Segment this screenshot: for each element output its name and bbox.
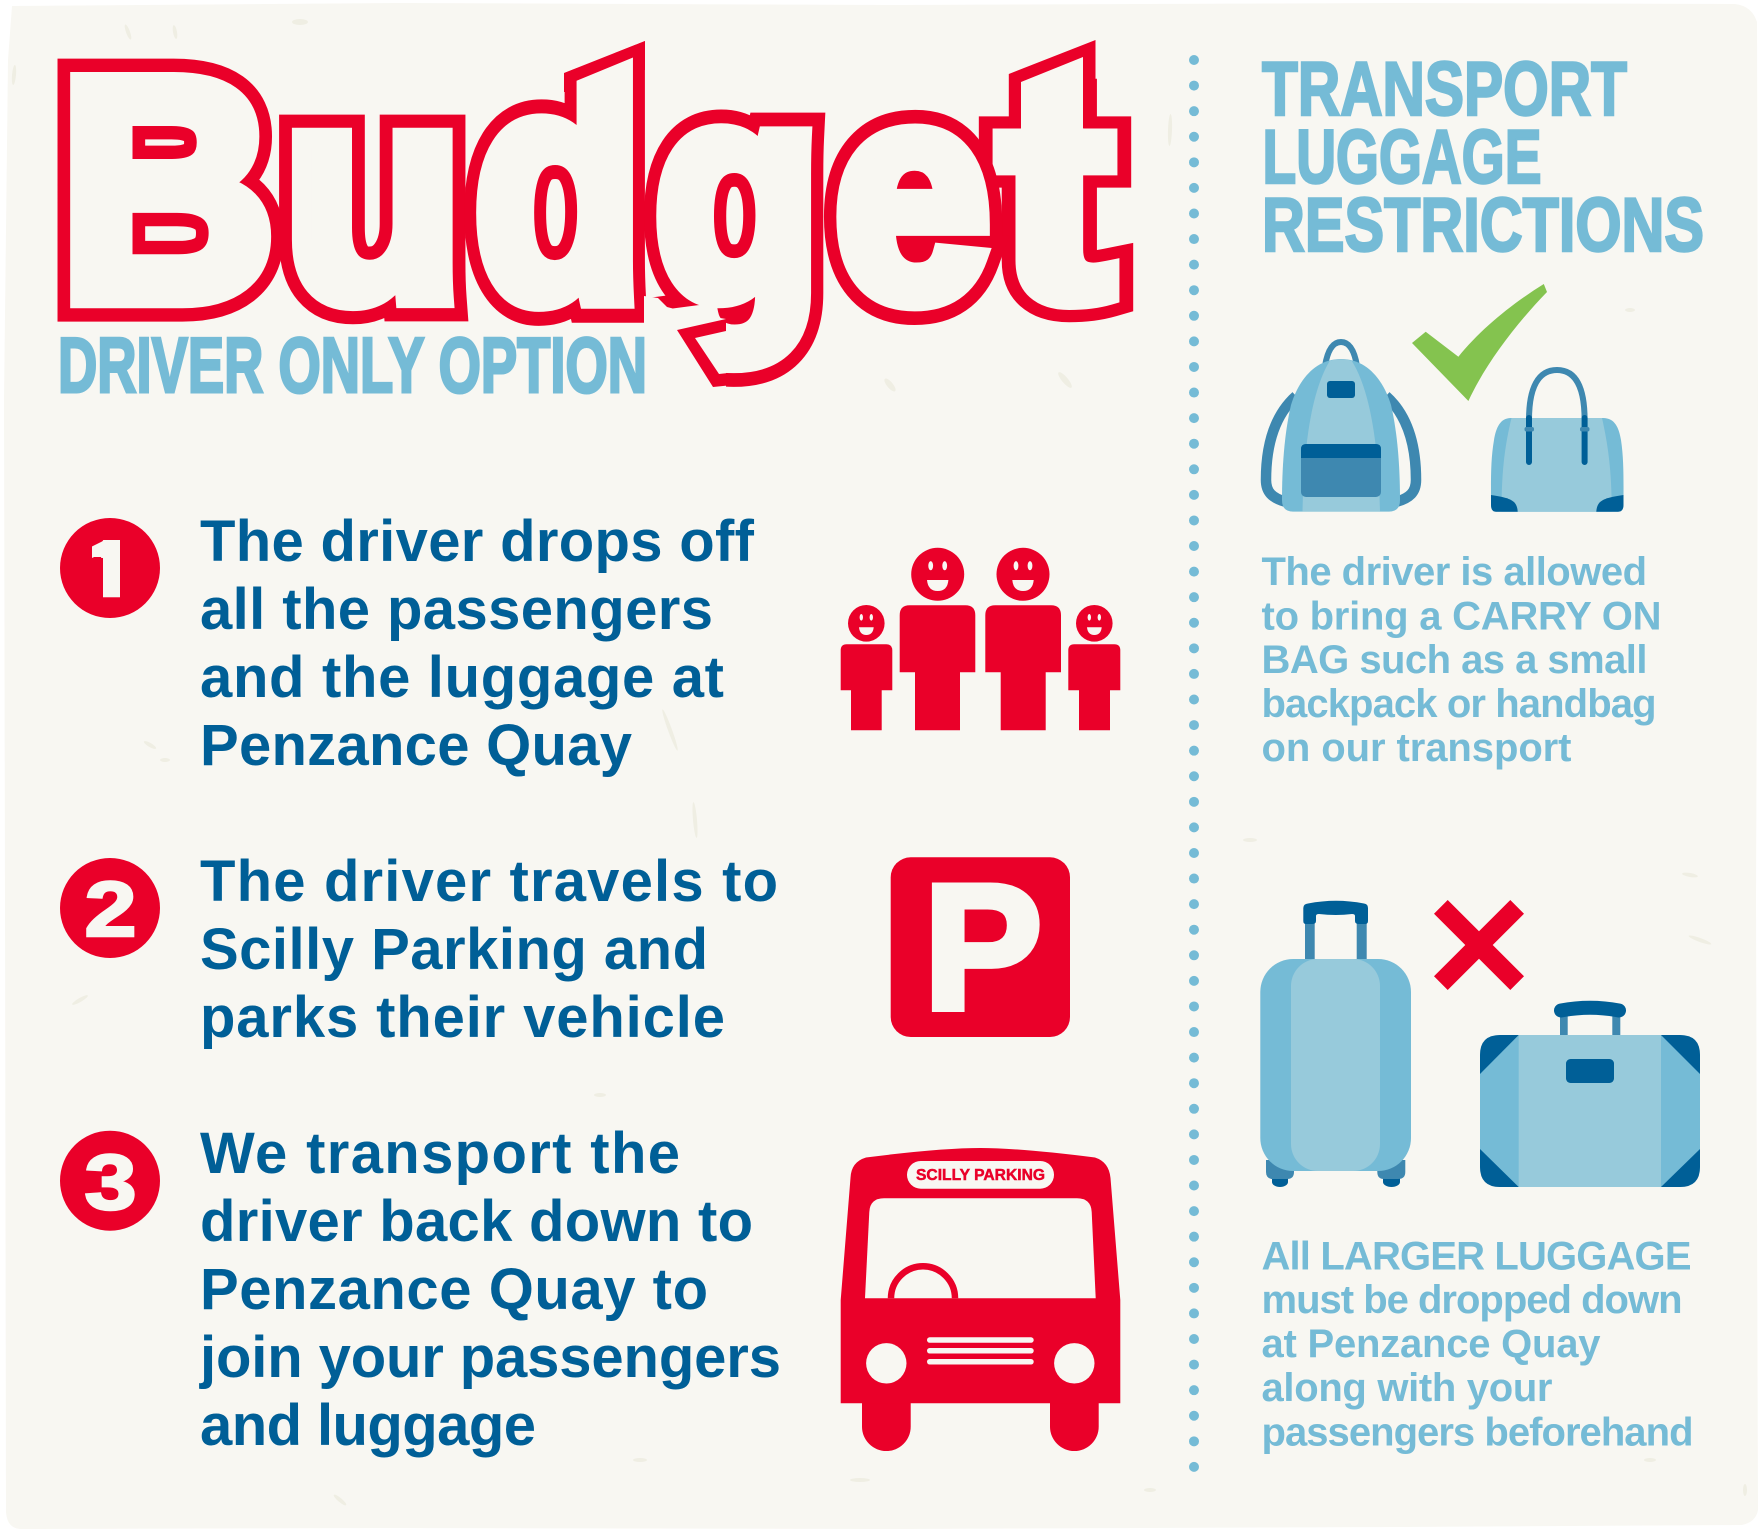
grille [927, 1337, 1034, 1364]
case handle poles [1560, 1012, 1620, 1036]
bus body [841, 1148, 1120, 1403]
icon: large suitcase [1480, 1008, 1700, 1187]
person: adult left [900, 548, 975, 730]
backpack pocket [1301, 444, 1381, 497]
letter d: d [474, 6, 643, 367]
destination sign: SCILLY PARKING [916, 1167, 1045, 1184]
step 3 text: Penzance Quay to [200, 1257, 708, 1322]
letter B: B [60, 14, 275, 365]
letter u: u [284, 25, 463, 363]
letter e: e [835, 22, 990, 363]
icon: parking sign: P [924, 848, 1042, 1046]
backpack handle [1325, 342, 1357, 366]
letter g: g [654, 23, 821, 365]
step 1 text: and the luggage at [200, 645, 724, 710]
person: child left [841, 605, 892, 730]
step 1 text: all the passengers [200, 577, 713, 642]
step 2 number badge: 2 [84, 866, 137, 953]
step 3 number badge [60, 1131, 160, 1231]
step 1 number badge [60, 518, 160, 618]
case tag [1566, 1059, 1614, 1083]
backpack front panel [1302, 359, 1380, 512]
text: carry on allowance: The driver is allowed [1262, 550, 1647, 594]
heading: transport luggage restrictions [1262, 47, 1704, 268]
step 1 text [200, 509, 755, 778]
text: carry on allowance: on our transport [1262, 726, 1572, 770]
case front panel [1519, 1035, 1661, 1187]
step 3 text: driver back down to [200, 1189, 753, 1254]
case handle bar [1561, 1008, 1619, 1010]
text: larger luggage rule: along with your [1262, 1366, 1552, 1410]
bus windscreen [865, 1198, 1096, 1298]
text: carry on allowance: to bring a CARRY ON [1262, 594, 1662, 638]
letter d: d [474, 6, 643, 367]
icon: parking sign [891, 848, 1070, 1046]
icon: trolley suitcase [1260, 901, 1411, 1187]
suitcase handle poles [1305, 920, 1367, 960]
case corners [1480, 1035, 1700, 1187]
letter g: g [654, 23, 821, 365]
text: carry on allowance: backpack or handbag [1262, 682, 1656, 726]
suitcase body [1260, 959, 1411, 1171]
step 3 text: join your passengers [199, 1325, 781, 1390]
suitcase wheels [1266, 1160, 1405, 1187]
angular tail of the g [644, 296, 728, 395]
heading: transport luggage restrictions: LUGGAGE [1262, 115, 1542, 200]
person: child right [1068, 605, 1120, 730]
steering wheel [891, 1266, 955, 1298]
suitcase front panel [1291, 959, 1380, 1171]
step 1 number badge: 1 [79, 526, 135, 613]
text: larger luggage rule: must be dropped down [1262, 1278, 1682, 1322]
step 3 text: and luggage [200, 1393, 536, 1458]
handbag front panel [1502, 418, 1612, 512]
icon: green check mark [1412, 284, 1547, 401]
backpack straps [1266, 396, 1416, 502]
heading: transport luggage restrictions: TRANSPORT [1262, 47, 1627, 132]
text: larger luggage rule: at Penzance Quay [1262, 1322, 1601, 1366]
backpack body [1282, 359, 1400, 512]
letter t: t [999, 23, 1113, 363]
letter t: t [999, 23, 1113, 363]
handbag handle straps [1524, 418, 1590, 462]
destination sign [907, 1161, 1054, 1189]
person: adult right [985, 548, 1061, 730]
step 2 text [200, 849, 778, 1050]
suitcase handle bar [1303, 901, 1368, 924]
step 3 text [199, 1121, 781, 1458]
icon: red cross [1434, 900, 1524, 990]
step 3 number badge: 3 [84, 1139, 137, 1226]
step 3 text: We transport the [200, 1121, 680, 1186]
step 2 number badge [60, 858, 160, 958]
case body [1480, 1035, 1700, 1187]
step 2 text: parks their vehicle [200, 985, 725, 1050]
headlights [866, 1343, 1095, 1384]
slanted top of the d stem [552, 25, 660, 92]
handbag handle [1529, 370, 1585, 420]
subtitle: driver only option: DRIVER ONLY OPTION [58, 321, 647, 409]
icon: Scilly Parking bus [841, 1148, 1120, 1451]
backpack tag [1327, 381, 1355, 398]
title: Budget logo wordmark [60, 6, 1113, 395]
step 1 text: Penzance Quay [200, 713, 632, 778]
handbag corners [1491, 495, 1624, 512]
text: carry on allowance [1262, 550, 1662, 770]
step 2 text: Scilly Parking and [200, 917, 708, 982]
letter e: e [835, 22, 990, 363]
icon: backpack [1266, 342, 1416, 512]
icon: handbag [1491, 370, 1624, 512]
icon: group of four smiling people [841, 548, 1120, 730]
step 2 text: The driver travels to [200, 849, 778, 914]
text: larger luggage rule: passengers beforehand [1262, 1410, 1694, 1454]
text: carry on allowance: BAG such as a small [1262, 638, 1648, 682]
handbag body [1491, 418, 1624, 512]
text: larger luggage rule: All LARGER LUGGAGE [1262, 1234, 1692, 1278]
step 1 text: The driver drops off [200, 509, 755, 574]
letter u: u [284, 25, 463, 363]
bus wheels [862, 1395, 1099, 1451]
tall slanted stem of the t [1009, 40, 1096, 140]
text: larger luggage rule [1262, 1234, 1694, 1454]
letter B: B [60, 14, 275, 365]
